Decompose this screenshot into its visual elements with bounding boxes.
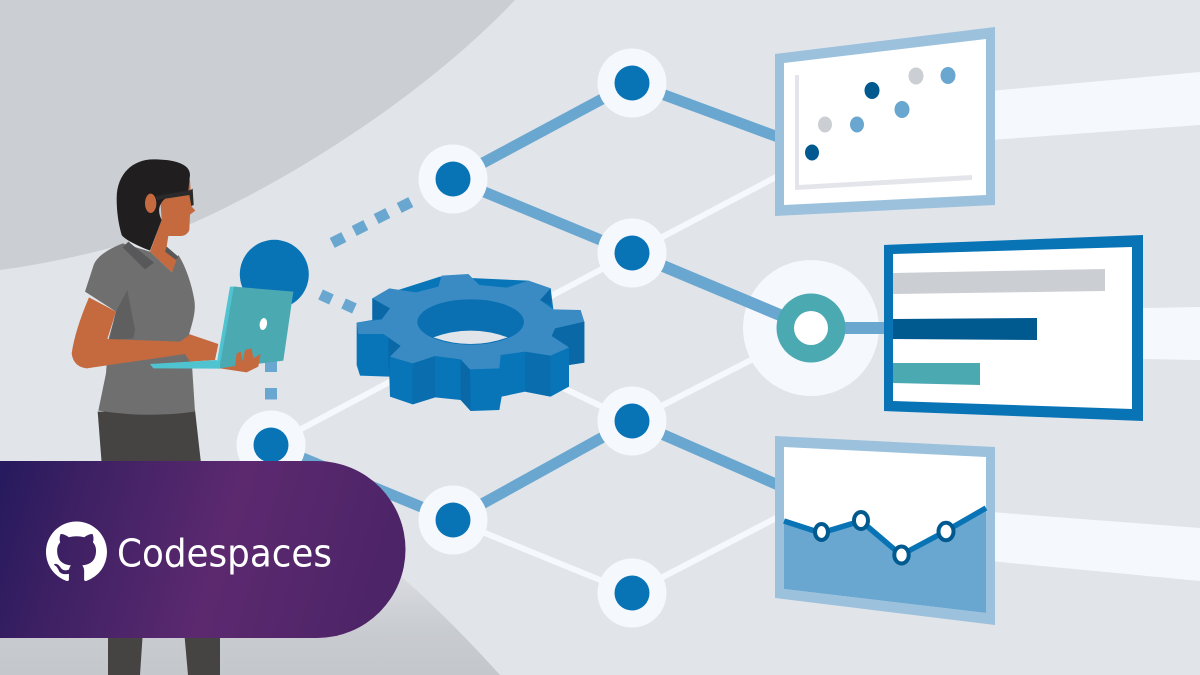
scatter points	[805, 67, 956, 160]
network: thin white connectors	[271, 176, 790, 593]
node 1	[598, 48, 666, 118]
highlighted node halo	[743, 260, 879, 396]
banner title: Codespaces	[117, 532, 332, 576]
trousers	[98, 410, 201, 463]
network: thick blue connectors	[271, 83, 778, 520]
legs below banner	[108, 630, 220, 675]
area fill	[784, 508, 986, 613]
dotted connector to gear	[318, 289, 357, 314]
node 5	[418, 486, 488, 554]
highlighted teal node	[776, 294, 846, 362]
bar: dark blue	[893, 318, 1037, 340]
dotted connector to upper node	[330, 197, 413, 248]
person with laptop	[72, 159, 293, 463]
icon: 3D gear	[357, 274, 584, 411]
node 2	[418, 144, 488, 214]
banner	[0, 461, 405, 638]
white band: area chart	[990, 512, 1200, 581]
node 4	[598, 386, 666, 456]
white band: bar chart	[1140, 307, 1200, 360]
white band: top chart	[990, 72, 1200, 140]
node 6	[598, 558, 666, 628]
chart axes	[795, 75, 972, 190]
background shape: top-left grey arc	[0, 0, 515, 270]
node 3	[598, 218, 666, 288]
ear	[145, 194, 156, 213]
line	[784, 508, 986, 555]
shirt shadow	[109, 290, 135, 340]
panel: area line chart	[775, 436, 995, 625]
panel: bar chart	[884, 235, 1143, 421]
collar	[123, 242, 178, 269]
large blue circle behind laptop	[240, 240, 309, 309]
arm	[72, 297, 218, 368]
line markers	[815, 512, 954, 564]
bar: grey	[893, 269, 1105, 294]
dotted connector to lower node	[265, 360, 277, 400]
node 7	[236, 410, 306, 480]
laptop	[150, 287, 293, 369]
background shape: bottom grey arc	[0, 505, 500, 675]
network nodes	[236, 48, 666, 628]
bar: teal	[893, 363, 980, 385]
neck and face	[150, 180, 195, 272]
fingers	[220, 348, 261, 372]
shirt	[85, 243, 195, 415]
glasses	[156, 189, 194, 206]
highlighted connector	[632, 253, 890, 328]
icon: GitHub logo	[46, 522, 107, 581]
hair	[117, 159, 190, 251]
panel: scatter chart	[775, 27, 995, 216]
